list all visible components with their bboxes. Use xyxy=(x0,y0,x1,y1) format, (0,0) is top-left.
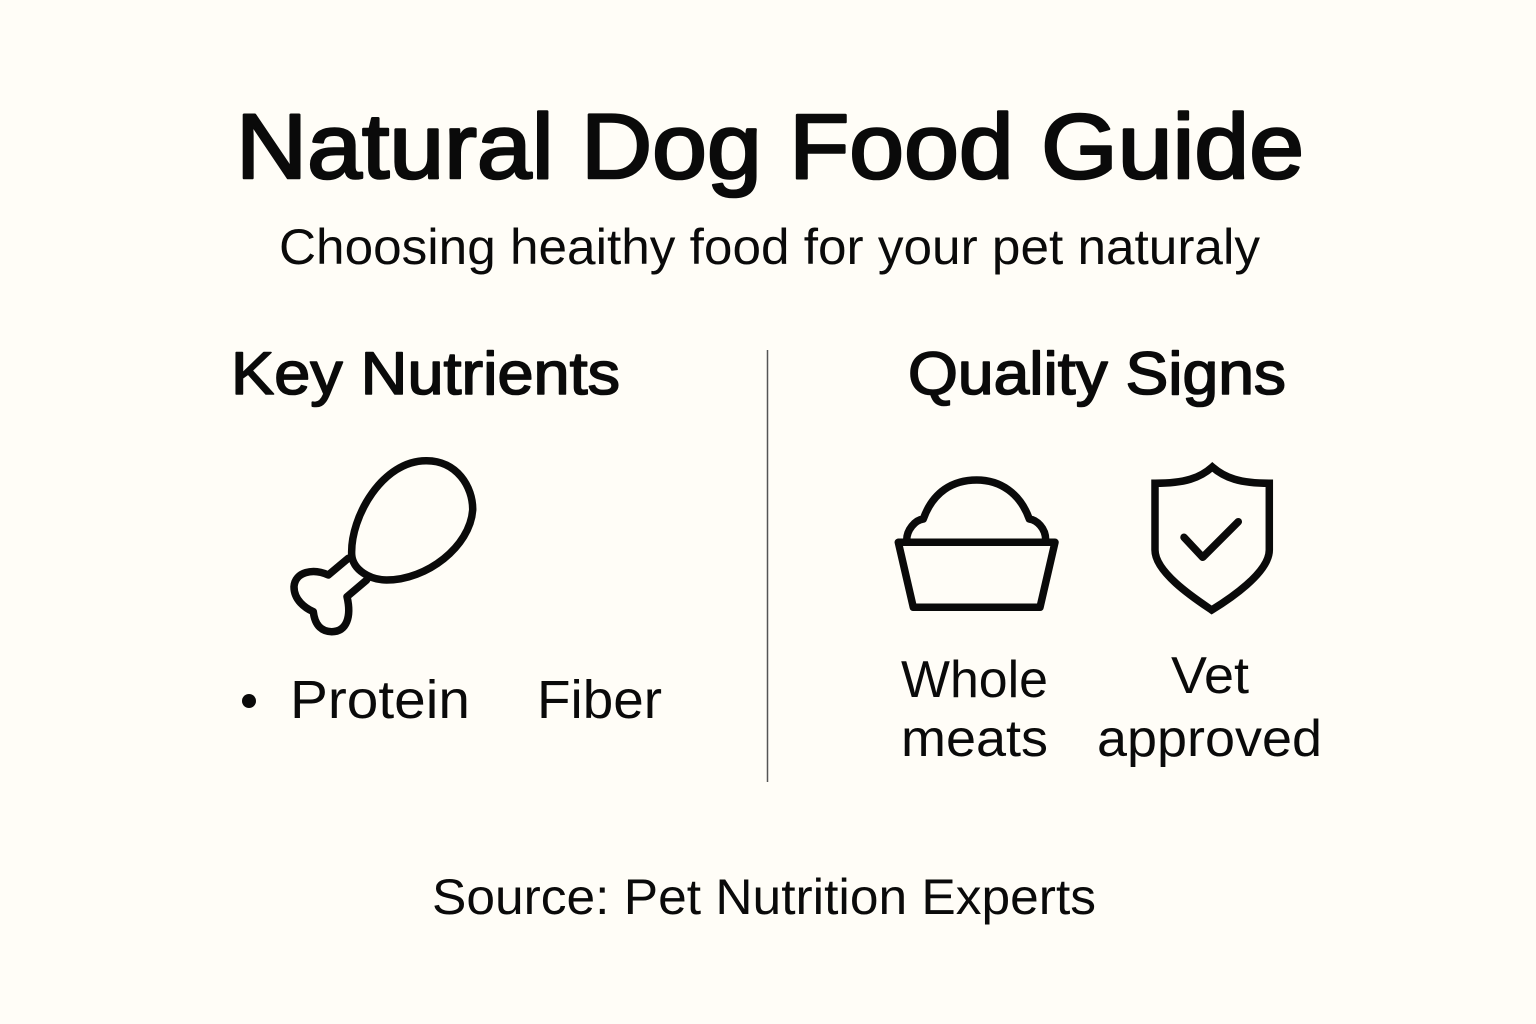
icon: chicken drumstick xyxy=(294,461,473,632)
heading: quality signs: Quality Signs xyxy=(908,340,1286,407)
panel: key nutrients xyxy=(231,340,662,730)
heading: key nutrients: Key Nutrients xyxy=(231,340,620,407)
label: vet approved: Vet xyxy=(1171,647,1250,705)
title: Natural Dog Food Guide xyxy=(236,96,1304,198)
label: whole meats: Whole xyxy=(901,651,1048,709)
label: whole meats: meats xyxy=(901,710,1048,768)
label: fiber: Fiber xyxy=(537,670,662,730)
label: protein: Protein xyxy=(290,670,470,730)
source note: Source: Pet Nutrition Experts xyxy=(432,869,1096,925)
label: vet approved: approved xyxy=(1097,710,1322,768)
subtitle: Choosing heaithy food for your pet naturaly xyxy=(279,219,1260,275)
label: whole meats xyxy=(901,651,1048,768)
divider xyxy=(766,350,768,782)
icon: shield with check xyxy=(1155,467,1269,610)
panel: quality signs xyxy=(898,340,1322,768)
bullet xyxy=(242,694,256,708)
icon: food bowl xyxy=(898,480,1055,607)
label: vet approved xyxy=(1097,647,1322,768)
